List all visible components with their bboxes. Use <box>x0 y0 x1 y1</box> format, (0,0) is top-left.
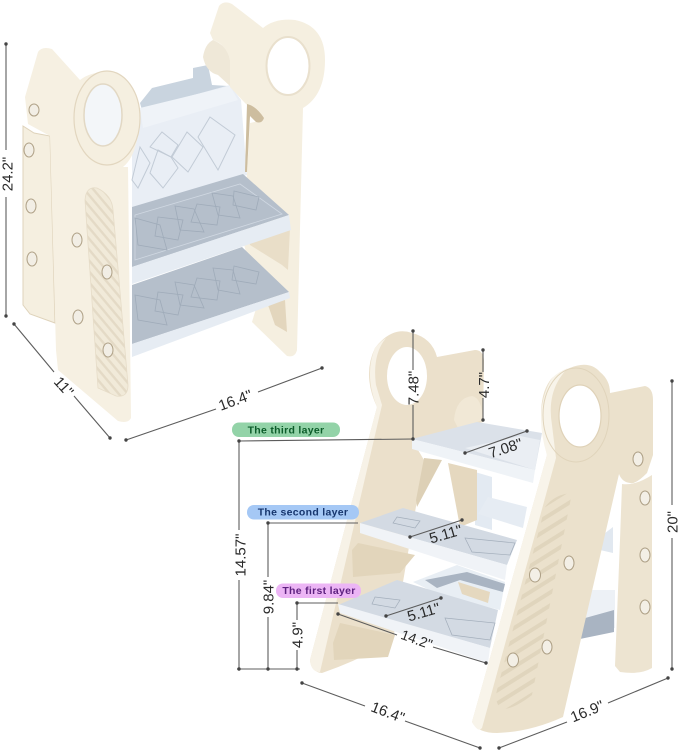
stool 1 handle notch <box>245 104 264 172</box>
dimension: 16.9 base depth <box>497 676 670 750</box>
dimension: 14.57 third layer height <box>232 439 413 669</box>
dimension: 7.48 ring height: 7.48" <box>406 371 422 405</box>
stool 1 back board <box>132 85 247 210</box>
dimension: 4.9 first layer height: 4.9" <box>290 622 306 648</box>
dimension: 11 depth: 11" <box>50 374 77 400</box>
stool 1 back board pattern <box>132 117 235 188</box>
stool 1 small arch <box>203 40 230 86</box>
dimension: 16.4 base width <box>300 681 482 750</box>
stool 2 back leg lower <box>458 582 490 603</box>
stool 1 front ring hole <box>84 84 122 146</box>
label: the third layer <box>232 422 340 437</box>
stool 2 front ring rim <box>543 368 609 462</box>
stool 1 bolts <box>24 104 113 357</box>
stool 1 stripe grip <box>85 188 128 396</box>
dimension: 16.9 base depth: 16.9" <box>568 697 607 726</box>
stool 2 front panel edge highlight <box>472 368 568 730</box>
dimension: 24.2 height: 24.2" <box>0 157 16 191</box>
dimension: 4.7 handle height: 4.7" <box>476 372 493 398</box>
dimension: 16.4 width folded <box>124 366 324 442</box>
stool 2 tray gap <box>425 572 505 592</box>
stool 2 front ring hole <box>559 385 601 447</box>
stool 2 rear bars <box>475 472 615 640</box>
stool 1 front ring <box>74 71 140 165</box>
dimension: 9.84 second layer height <box>260 521 358 669</box>
stool 2 third step <box>412 422 542 483</box>
stool 1 back panel <box>210 2 325 356</box>
stool 1: folded view <box>23 2 325 422</box>
stool 2 lower back tray <box>413 565 505 610</box>
dimension: 9.84 second layer height: 9.84" <box>260 580 278 614</box>
stool 1 lower tread <box>132 247 290 357</box>
stool 2 rear leg <box>615 475 652 673</box>
stool 1 rear panel shade <box>248 228 290 270</box>
dimension: 14.57 third layer height: 14.57" <box>232 534 250 576</box>
stool 2 brace strip <box>416 458 442 507</box>
stool 2 front panel <box>472 365 653 733</box>
stool 2 second step <box>360 508 517 580</box>
stool 2 left cutouts <box>352 543 415 577</box>
label: the second layer: The second layer <box>258 506 348 518</box>
label: the second layer <box>247 505 359 520</box>
stool 2 small arch <box>454 396 483 428</box>
stool 2 first step <box>338 580 498 663</box>
dimension: 14.2 step width: 14.2" <box>399 626 435 652</box>
stool 1 upper tread <box>132 174 291 284</box>
dimension: 5.11 first step depth <box>384 596 443 625</box>
stool 2 back leg upper <box>448 463 477 527</box>
dimension: 7.08 third step depth <box>463 429 529 462</box>
label: the third layer: The third layer <box>248 424 324 436</box>
dimension: 5.11 second step depth <box>408 518 464 547</box>
dimension: 20 overall height <box>664 379 679 671</box>
label: the first layer: The first layer <box>282 585 356 597</box>
stool 2 left panel <box>310 331 484 673</box>
stool 2: opened view <box>310 331 653 733</box>
dimension: height baseline <box>237 667 300 671</box>
dimension: 5.11 first step depth: 5.11" <box>405 600 442 625</box>
dimension: 4.9 first layer height <box>290 601 338 669</box>
dimension: 7.08 third step depth: 7.08" <box>487 435 525 462</box>
stool 2 bolts <box>508 452 650 667</box>
stool 1 top cap piece <box>140 65 228 110</box>
dimension: 14.2 step width <box>336 612 488 665</box>
stool 1 back board band <box>140 86 238 128</box>
stool 2 left panel ring hole <box>387 347 427 405</box>
stool 1 rear leg <box>23 126 55 323</box>
stool 1 back panel ring hole <box>266 37 310 95</box>
dimension: 4.7 handle height <box>476 348 493 422</box>
dimension: 16.4 width folded: 16.4" <box>216 387 255 415</box>
dimension: 11 depth <box>12 322 112 440</box>
dimension: 7.48 ring height <box>406 329 422 441</box>
dimension: 24.2 height <box>0 42 16 318</box>
stool 2 left panel edge highlight <box>310 338 386 672</box>
stool 1 lower slot <box>268 300 287 332</box>
dimension: 5.11 second step depth: 5.11" <box>427 522 464 547</box>
dimension: 16.4 base width: 16.4" <box>368 699 407 727</box>
stool 1 front panel <box>25 48 139 422</box>
stool 2 grip area <box>496 493 572 709</box>
